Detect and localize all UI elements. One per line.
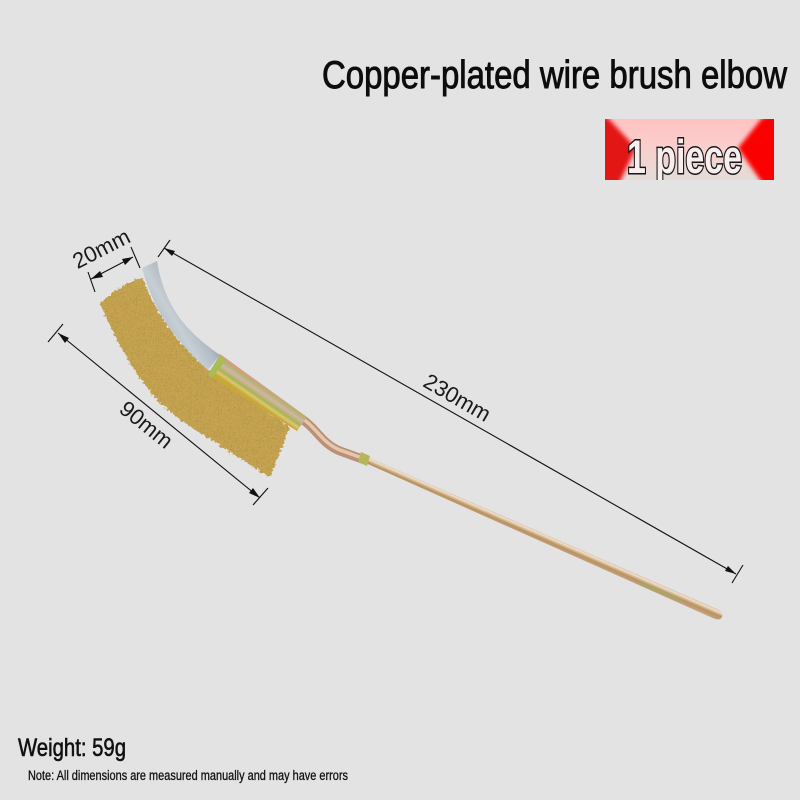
dimension: 20mm bbox=[68, 224, 140, 292]
badge: 1 piece bbox=[605, 119, 774, 180]
dimension: 90mm: 90mm bbox=[115, 396, 178, 454]
right red wedge bbox=[736, 119, 774, 180]
handle rod bbox=[361, 455, 722, 620]
dimension: 20mm: 20mm bbox=[68, 224, 134, 274]
handle neck bbox=[303, 419, 362, 459]
ferrule bbox=[208, 354, 307, 431]
silver back plate bbox=[142, 261, 220, 370]
weight label: Weight: 59g bbox=[18, 734, 126, 762]
wire bristles bbox=[100, 277, 290, 477]
badge label: 1 piece bbox=[627, 130, 742, 183]
measurement note: Note: All dimensions are measured manually and may have errors bbox=[28, 768, 348, 783]
handle collar bbox=[358, 452, 370, 466]
dimension: 230mm bbox=[158, 240, 743, 583]
dimension: 230mm: 230mm bbox=[419, 368, 495, 427]
dimension: 90mm bbox=[48, 324, 268, 505]
rod green tint bbox=[640, 583, 682, 601]
ferrule bracket bbox=[208, 355, 226, 378]
left red wedge bbox=[605, 119, 634, 180]
brush product photo bbox=[100, 261, 722, 620]
